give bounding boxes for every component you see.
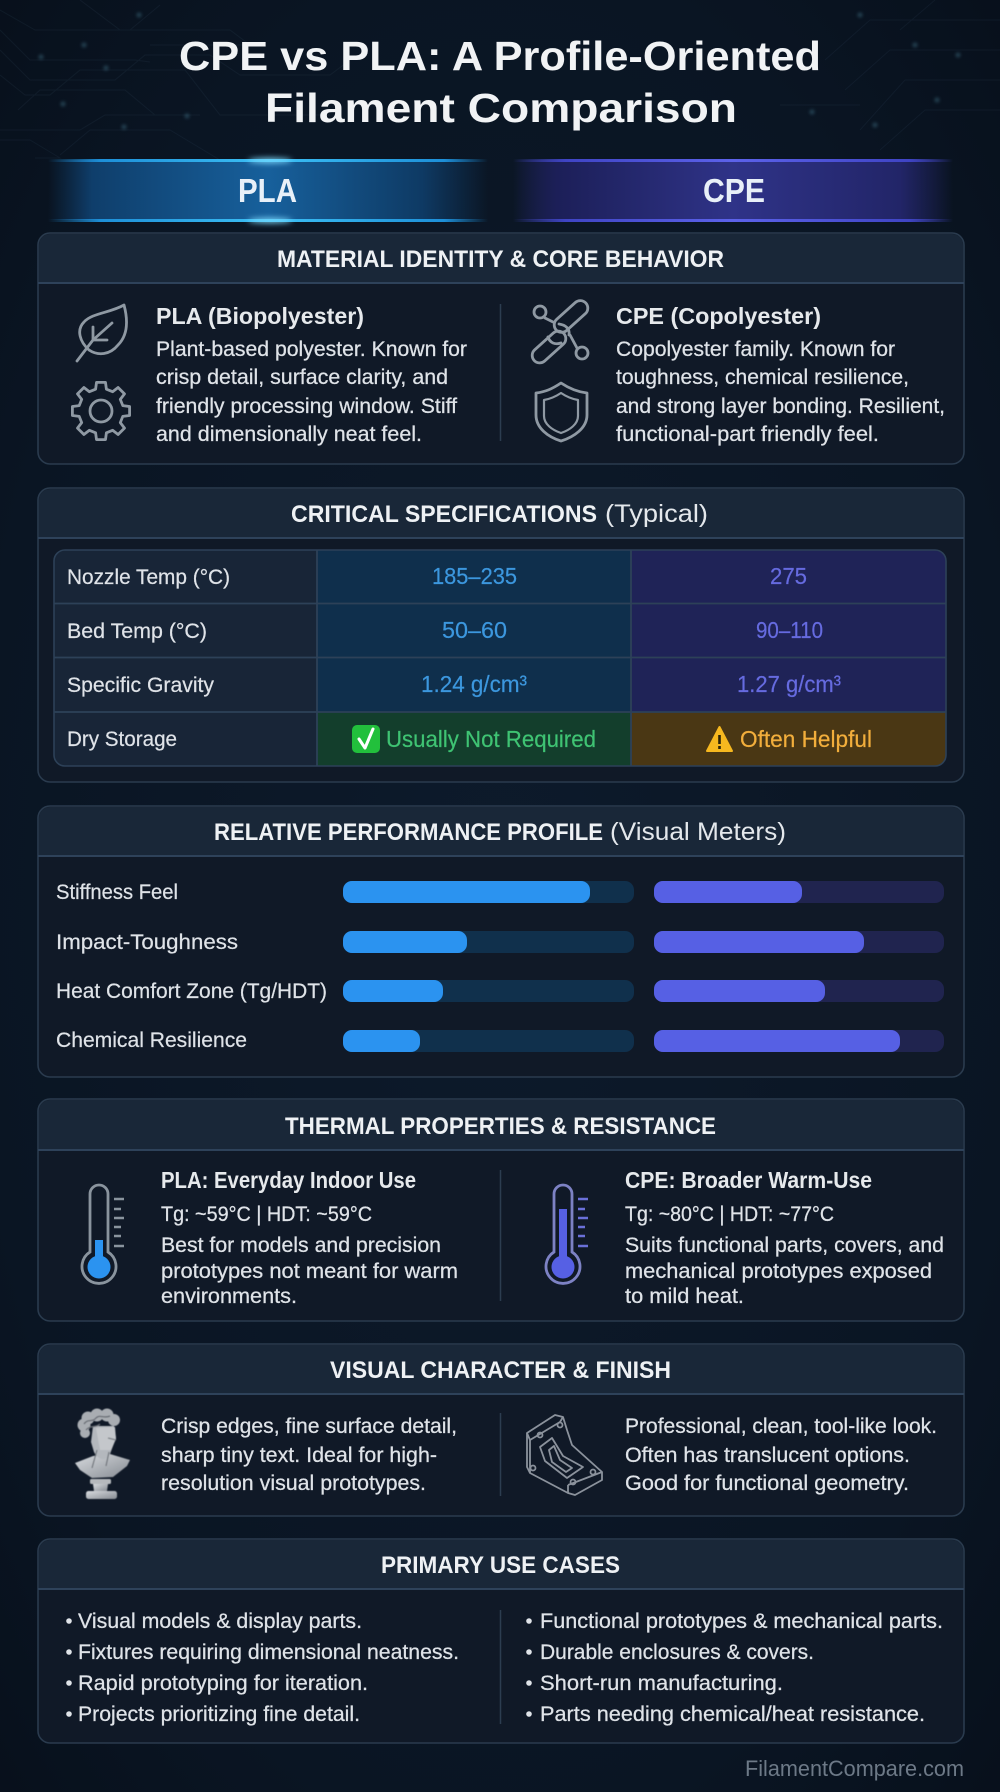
row: dry storage: Usually Not Required [386,726,596,752]
panel: material identity [38,233,964,464]
text: CPE identity: Copolyester family. Known for [616,337,895,361]
text: CPE thermal [625,1167,944,1308]
icon: machined bracket [527,1415,602,1495]
row: nozzle temp: 275 [770,563,807,589]
row: nozzle temp [67,563,807,589]
text: PLA thermal: Best for models and precision [161,1233,441,1257]
panel: thermal properties [38,1099,964,1321]
row: specific gravity [67,671,841,697]
heading: material identity: MATERIAL IDENTITY & CORE BEHAVIOR [277,246,724,273]
text: PLA thermal: prototypes not meant for warm [161,1259,458,1283]
row: bed temp: Bed Temp (°C) [67,619,207,643]
meter: stiffness feel: Stiffness Feel [56,880,178,904]
meter: chemical resilience [56,1028,944,1052]
text: CPE visual: Good for functional geometry. [625,1471,909,1495]
text: PLA identity [156,303,467,446]
footer: site name: FilamentCompare.com [745,1756,964,1781]
specification table [54,550,946,766]
text: PLA identity: Plant-based polyester. Known for [156,337,467,361]
list: PLA use cases: Rapid prototyping for iteration. [78,1671,368,1695]
text: CPE identity [616,303,945,446]
meter: impact toughness [56,930,944,954]
meter: chemical resilience: Chemical Resilience [56,1028,247,1052]
title: CPE vs PLA: A Profile-Oriented [179,33,821,79]
row: bed temp: 50–60 [442,617,507,643]
icon: shield [536,383,587,441]
text: CPE visual: Professional, clean, tool-like look. [625,1414,937,1438]
row: dry storage [67,725,872,753]
meter: impact toughness: Impact-Toughness [56,930,238,954]
list: PLA use cases: Projects prioritizing fine detail. [78,1702,360,1726]
row: dry storage: Dry Storage [67,727,177,751]
list: CPE use cases: Parts needing chemical/heat resistance. [540,1702,925,1726]
row: bed temp [67,617,823,643]
row: nozzle temp: Nozzle Temp (°C) [67,565,230,589]
list: CPE use cases: Short-run manufacturing. [540,1671,783,1695]
icon: warning triangle [707,727,732,751]
meter: heat comfort zone: Heat Comfort Zone (Tg/HDT) [56,979,327,1003]
text: PLA identity: and dimensionally neat feel. [156,422,422,446]
icon: check mark [352,725,380,753]
row: specific gravity: 1.24 g/cm³ [421,671,527,697]
heading: visual character: VISUAL CHARACTER & FINISH [330,1357,671,1384]
text: PLA thermal [161,1167,458,1308]
heading: thermal properties: THERMAL PROPERTIES & RESISTANCE [285,1113,716,1140]
icon: chain links [529,298,591,366]
panel: primary use cases [38,1539,964,1743]
icon: CPE thermometer [546,1185,588,1283]
heading: relative performance: RELATIVE PERFORMANCE PROFILE [214,819,603,846]
list: PLA use cases: Fixtures requiring dimensional neatness. [78,1640,459,1664]
icon: leaf [77,305,126,361]
row: specific gravity: Specific Gravity [67,673,214,697]
heading: relative performance: (Visual Meters) [610,818,786,846]
meter: heat comfort zone [56,979,944,1003]
text: PLA thermal: environments. [161,1284,297,1308]
text: PLA thermal: PLA: Everyday Indoor Use [161,1167,416,1193]
text: CPE identity: and strong layer bonding. Resilient, [616,394,945,418]
text: CPE thermal: to mild heat. [625,1284,744,1308]
panel: visual character [38,1344,964,1516]
heading: critical specifications: (Typical) [605,500,708,528]
icon: gear [72,382,130,440]
text: PLA identity: crisp detail, surface clarity, and [156,365,448,389]
text: PLA visual: resolution visual prototypes. [161,1471,426,1495]
text: CPE thermal: CPE: Broader Warm-Use [625,1167,872,1193]
heading: critical specifications: CRITICAL SPECIFICATIONS [291,501,597,528]
icon: marble bust [75,1408,130,1499]
list: PLA use cases: Visual models & display parts. [78,1609,362,1633]
text: CPE identity: toughness, chemical resilience, [616,365,909,389]
text: CPE thermal: Tg: ~80°C | HDT: ~77°C [625,1202,834,1226]
text: PLA visual: sharp tiny text. Ideal for high- [161,1443,437,1467]
text: PLA visual [161,1414,457,1495]
column header: CPE [513,159,953,222]
row: specific gravity: 1.27 g/cm³ [737,671,841,697]
text: CPE visual [625,1414,937,1495]
text: CPE visual: Often has translucent options. [625,1443,910,1467]
panel: relative performance [38,806,964,1077]
text: CPE thermal: mechanical prototypes exposed [625,1259,932,1283]
row: dry storage: Often Helpful [740,726,872,752]
list: CPE use cases: Functional prototypes & mechanical parts. [540,1609,943,1633]
row: bed temp: 90–110 [756,617,823,643]
text: CPE identity: CPE (Copolyester) [616,303,821,329]
list: CPE use cases [526,1609,943,1726]
text: CPE thermal: Suits functional parts, covers, and [625,1233,944,1257]
text: PLA identity: PLA (Biopolyester) [156,303,364,329]
list: CPE use cases: Durable enclosures & covers. [540,1640,814,1664]
column header: CPE: CPE [703,172,765,209]
column header: PLA: PLA [238,172,297,209]
row: nozzle temp: 185–235 [432,563,517,589]
icon: PLA thermometer [82,1185,124,1283]
text: PLA visual: Crisp edges, fine surface detail, [161,1414,457,1438]
text: PLA identity: friendly processing window. Stiff [156,394,457,418]
column header: PLA [48,158,488,223]
text: CPE identity: functional-part friendly feel. [616,422,879,446]
heading: primary use cases: PRIMARY USE CASES [381,1552,620,1579]
list: PLA use cases [66,1609,459,1726]
panel: critical specifications [38,488,964,782]
text: PLA thermal: Tg: ~59°C | HDT: ~59°C [161,1202,372,1226]
title: Filament Comparison [265,85,737,131]
meter: stiffness feel [56,880,944,904]
title [179,33,821,131]
